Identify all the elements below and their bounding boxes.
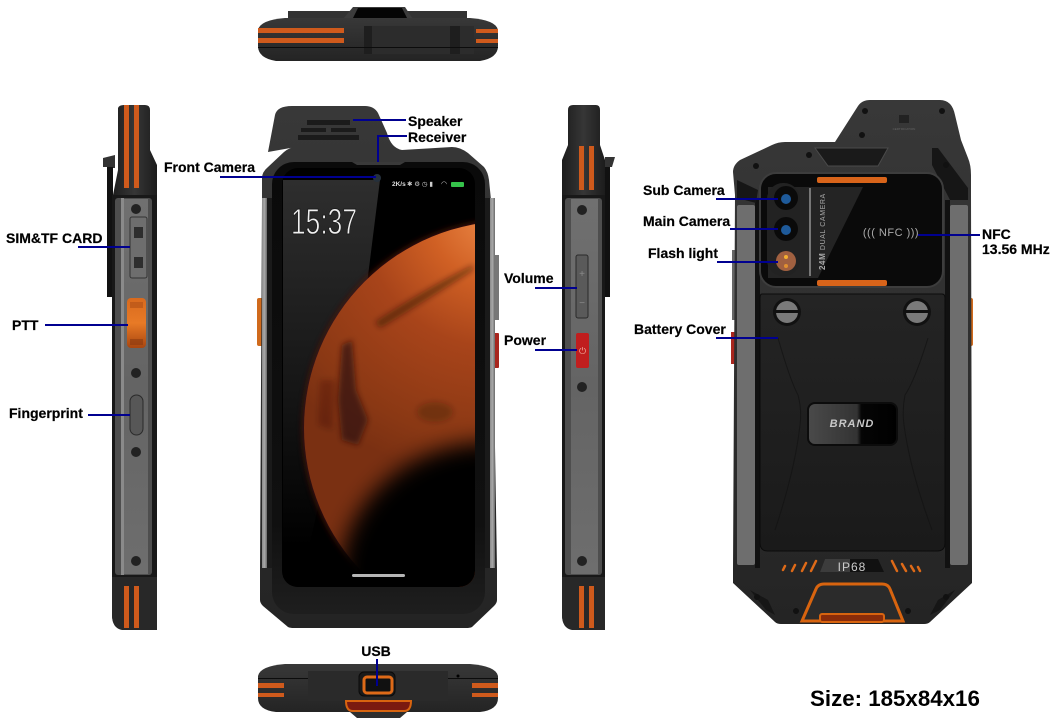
clock: 15:37 — [291, 201, 357, 242]
left screw lock — [773, 298, 801, 326]
label: receiver — [378, 129, 467, 162]
NFC mark: ((( NFC ))) — [863, 227, 919, 239]
left side view of phone — [103, 105, 157, 630]
front view of phone — [257, 106, 499, 628]
label: speaker: Speaker — [408, 113, 463, 129]
bottom latch — [346, 701, 411, 718]
status bar: ◠ — [441, 181, 447, 188]
label: volume — [504, 270, 577, 288]
SIM and TF card tray — [130, 217, 147, 278]
USB port — [359, 672, 395, 696]
right screw lock — [903, 298, 931, 326]
camera module — [760, 173, 943, 287]
label: SIM and TF card: SIM&TF CARD — [6, 230, 102, 246]
PTT button — [127, 298, 146, 348]
front camera — [373, 174, 381, 182]
label: NFC: NFC — [982, 226, 1011, 242]
label: flash light — [648, 245, 778, 262]
status bar — [392, 180, 464, 188]
corner ridges — [737, 148, 968, 615]
brand badge — [808, 403, 897, 445]
label: power: Power — [504, 332, 547, 348]
label: NFC — [918, 226, 1050, 257]
power button — [576, 333, 589, 368]
certification mark — [893, 115, 915, 131]
fingerprint sensor — [130, 395, 143, 435]
IP68 badge — [820, 559, 884, 574]
label: sub camera — [643, 182, 778, 199]
camera spec text: 24M DUAL CAMERA — [818, 193, 827, 270]
speaker grille — [298, 120, 359, 140]
label: PTT: PTT — [12, 317, 39, 333]
flash light — [776, 251, 796, 271]
top grille — [815, 148, 888, 166]
home indicator — [352, 574, 405, 577]
status bar: 2K/s — [392, 181, 406, 188]
label: main camera: Main Camera — [643, 213, 730, 229]
sub camera lens — [774, 186, 798, 210]
volume button — [576, 255, 588, 318]
label: main camera — [643, 213, 778, 229]
label: fingerprint: Fingerprint — [9, 405, 83, 421]
screen wallpaper — [282, 168, 475, 587]
orange vents — [783, 561, 920, 571]
bottom view of phone — [258, 664, 498, 718]
label: volume: Volume — [504, 270, 554, 286]
orange bottom latch — [802, 584, 903, 622]
label: speaker — [353, 113, 463, 129]
IP68 badge: IP68 — [838, 560, 866, 574]
label: NFC: 13.56 MHz — [982, 241, 1050, 257]
battery cover — [760, 294, 945, 551]
label: receiver: Receiver — [408, 129, 467, 145]
certification mark: CERTIFICATION — [893, 127, 915, 131]
side buttons — [731, 250, 973, 364]
brand badge: BRAND — [830, 418, 874, 430]
main camera lens — [774, 217, 798, 241]
label: PTT — [12, 317, 128, 333]
volume button: − — [579, 298, 585, 309]
label: power — [504, 332, 577, 350]
label: front camera: Front Camera — [164, 159, 255, 175]
label: fingerprint — [9, 405, 130, 421]
top view of phone — [258, 7, 498, 61]
volume button: + — [579, 269, 585, 280]
label: sub camera: Sub Camera — [643, 182, 725, 198]
size caption: Size: 185x84x16 — [810, 686, 980, 711]
label: USB — [361, 643, 391, 686]
back view of phone — [731, 100, 973, 624]
receiver slot — [352, 162, 405, 165]
label: battery cover: Battery Cover — [634, 321, 726, 337]
label: USB: USB — [361, 643, 391, 659]
side buttons — [257, 255, 499, 368]
right side view of phone — [562, 105, 615, 630]
label: flash light: Flash light — [648, 245, 718, 261]
status bar: ✱ ⚙ ◷ ▮ — [407, 180, 433, 188]
power button: ⏻ — [579, 346, 586, 356]
